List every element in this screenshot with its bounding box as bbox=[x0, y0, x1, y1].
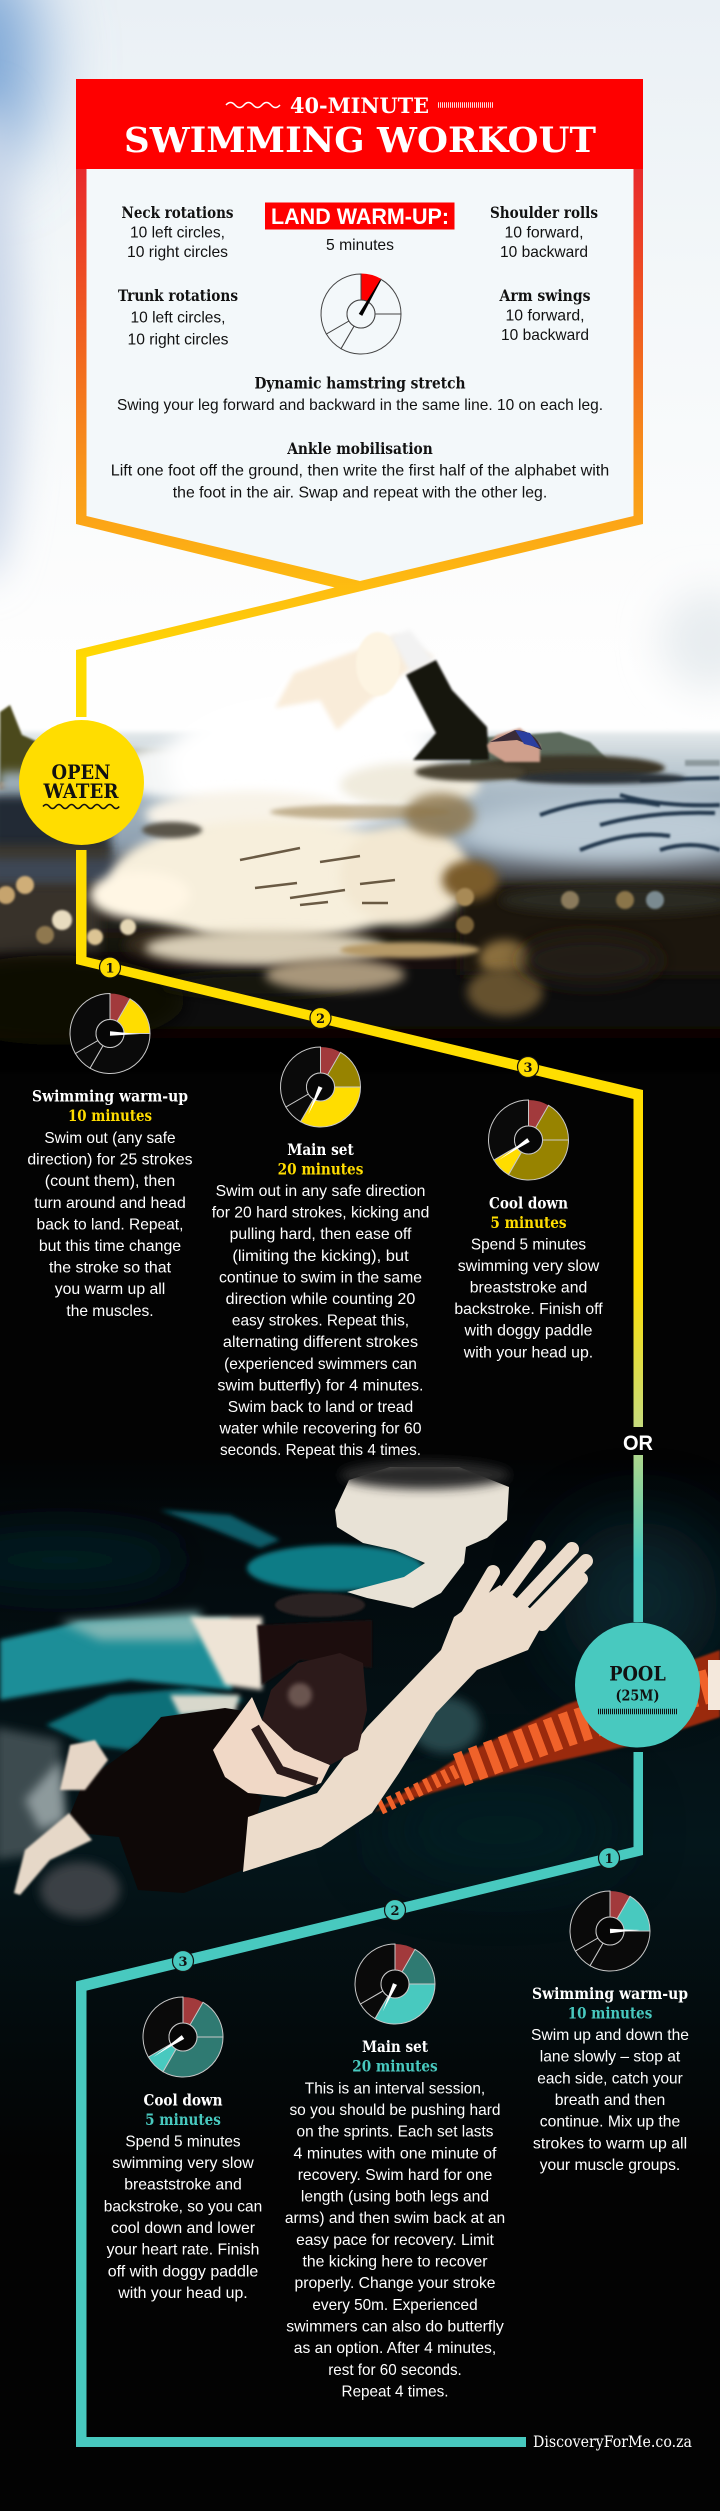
text: pool main set: Repeat 4 times. bbox=[342, 2383, 448, 2400]
path: warm-up frame bbox=[76, 165, 643, 717]
text: open water main set: alternating different strokes bbox=[223, 1334, 418, 1351]
text: open water main set: direction while counting 20 bbox=[226, 1291, 415, 1308]
text: pool cool down: cool down and lower bbox=[111, 2220, 256, 2237]
step marker 3 pool: 3 bbox=[178, 1955, 188, 1970]
text: pool main set: Main set bbox=[362, 2037, 429, 2056]
text: neck rotations bbox=[122, 203, 234, 261]
bokeh and lower glints bbox=[0, 876, 720, 1045]
text: pool cool down: Spend 5 minutes bbox=[125, 2133, 241, 2150]
text: open water swimming warm-up: you warm up all bbox=[55, 1281, 165, 1298]
text: trunk rotations bbox=[118, 286, 238, 348]
chart: land warm-up clock bbox=[321, 274, 401, 354]
background: pool photo bbox=[0, 1460, 720, 2160]
badge: pool: (25M) bbox=[616, 1686, 660, 1704]
text: pool swimming warm-up: 10 minutes bbox=[568, 2004, 652, 2022]
step marker 2 open water bbox=[310, 1008, 331, 1028]
water detail bbox=[0, 746, 720, 975]
path: open water route bbox=[76, 850, 643, 1427]
title line 1: 40-MINUTE bbox=[290, 93, 429, 118]
text: pool cool down: your heart rate. Finish bbox=[107, 2242, 259, 2259]
text: open water main set: pulling hard, then ease off bbox=[230, 1226, 412, 1243]
text: pool cool down: Cool down bbox=[144, 2090, 223, 2110]
text: open water cool down: Spend 5 minutes bbox=[471, 1236, 586, 1253]
badge: open water: OPEN bbox=[52, 760, 110, 784]
step marker 2 open water: 2 bbox=[316, 1012, 325, 1027]
text: open water swimming warm-up: the stroke so that bbox=[49, 1260, 172, 1277]
chart: pool warm-up clock bbox=[570, 1891, 650, 1971]
source credit: DiscoveryForMe.co.za bbox=[533, 2432, 692, 2451]
text: open water cool down: with your head up. bbox=[463, 1344, 593, 1361]
step marker 1 pool: 1 bbox=[604, 1852, 614, 1867]
text: arm swings: 10 forward, bbox=[506, 308, 584, 324]
text: open water swimming warm-up: the muscles. bbox=[66, 1303, 154, 1320]
chart: open water warm-up clock bbox=[70, 994, 150, 1073]
hills and trees bbox=[0, 705, 720, 790]
text: open water main set: easy strokes. Repeat this, bbox=[232, 1313, 409, 1330]
text: open water swimming warm-up: but this time change bbox=[39, 1238, 181, 1255]
text: pool main set bbox=[285, 2037, 505, 2400]
text: pool main set: so you should be pushing hard bbox=[289, 2102, 501, 2119]
text: open water main set: 20 minutes bbox=[278, 1160, 363, 1178]
text: open water swimming warm-up: turn around and head bbox=[34, 1195, 186, 1212]
text: arm swings: Arm swings bbox=[499, 286, 591, 305]
text: open water main set: seconds. Repeat this 4 times. bbox=[220, 1442, 421, 1459]
text: arm swings: 10 backward bbox=[501, 327, 589, 344]
text: pool main set: length (using both legs and bbox=[301, 2189, 489, 2206]
swimmer: goggle strap bbox=[255, 1727, 317, 1782]
background: sky bbox=[0, 0, 720, 770]
text: open water swimming warm-up: 10 minutes bbox=[68, 1106, 152, 1125]
text: open water cool down: backstroke. Finish off bbox=[454, 1301, 603, 1318]
text: open water swimming warm-up bbox=[27, 1086, 193, 1320]
text: open water cool down: Cool down bbox=[489, 1194, 568, 1212]
icon: barcode stripes bbox=[438, 102, 494, 108]
panel header: 40-minute swimming workout bbox=[76, 79, 643, 169]
text: pool cool down: 5 minutes bbox=[145, 2110, 221, 2129]
text: arm swings bbox=[499, 286, 591, 344]
text: pool cool down: breaststroke and bbox=[124, 2177, 242, 2194]
text: pool main set: every 50m. Experienced bbox=[312, 2297, 478, 2314]
text: ankle mobilisation: Ankle mobilisation bbox=[286, 439, 433, 458]
text: shoulder rolls bbox=[490, 203, 598, 261]
text: pool swimming warm-up: continue. Mix up the bbox=[540, 2114, 680, 2131]
text: pool main set: This is an interval session, bbox=[305, 2080, 485, 2097]
text: neck rotations: 10 right circles bbox=[127, 244, 228, 261]
chart: open water cool down clock bbox=[489, 1100, 568, 1180]
chart: pool cool down clock bbox=[143, 1997, 223, 2077]
text: pool cool down: backstroke, so you can bbox=[104, 2198, 262, 2215]
text: open water main set: continue to swim in the same bbox=[219, 1269, 422, 1286]
text: open water swimming warm-up: direction) for 25 strokes bbox=[27, 1152, 193, 1169]
text: pool cool down bbox=[104, 2090, 262, 2302]
text: pool swimming warm-up bbox=[531, 1984, 689, 2174]
background: open water photo bbox=[0, 630, 720, 1500]
text: pool swimming warm-up: lane slowly – stop at bbox=[540, 2049, 681, 2066]
text: open water main set: for 20 hard strokes, kicking and bbox=[212, 1205, 429, 1222]
text: pool main set: 4 minutes with one minute of bbox=[294, 2145, 497, 2162]
swimmer: arm and raised hand bbox=[243, 1547, 586, 1872]
icon: wave bbox=[226, 102, 280, 108]
text: open water cool down: with doggy paddle bbox=[464, 1323, 593, 1340]
label: or: OR bbox=[623, 1432, 653, 1455]
path: pool route bbox=[76, 1752, 643, 2447]
text: pool swimming warm-up: breath and then bbox=[555, 2092, 665, 2109]
badge: pool bbox=[575, 1622, 700, 1748]
text: dynamic hamstring stretch bbox=[117, 374, 603, 414]
badge: pool: POOL bbox=[609, 1662, 666, 1686]
step marker 3 open water bbox=[518, 1056, 538, 1078]
text: pool main set: arms) and then swim back at an bbox=[285, 2210, 505, 2227]
text: open water cool down bbox=[454, 1194, 603, 1361]
text: pool main set: recovery. Swim hard for one bbox=[298, 2167, 492, 2184]
chart: pool main set clock bbox=[355, 1944, 435, 2024]
chart: open water main set clock bbox=[281, 1047, 360, 1127]
splash bbox=[90, 655, 498, 961]
text: pool swimming warm-up: Swimming warm-up bbox=[532, 1984, 688, 2003]
text: pool main set: 20 minutes bbox=[352, 2056, 438, 2076]
text: ankle mobilisation: the foot in the air. Swap and repeat with the other leg. bbox=[173, 484, 547, 502]
text: trunk rotations: 10 left circles, bbox=[130, 310, 226, 326]
text: shoulder rolls: 10 forward, bbox=[504, 224, 584, 242]
text: shoulder rolls: 10 backward bbox=[500, 244, 588, 261]
text: open water cool down: breaststroke and bbox=[470, 1280, 587, 1296]
text: pool swimming warm-up: Swim up and down the bbox=[531, 2027, 689, 2044]
swimmer: cap bbox=[262, 1653, 367, 1765]
text: pool main set: as an option. After 4 minutes, bbox=[294, 2340, 496, 2357]
text: open water swimming warm-up: Swim out (any safe bbox=[44, 1130, 176, 1147]
text: open water main set: (experienced swimmers can bbox=[224, 1356, 417, 1373]
heading: land warm-up: LAND WARM-UP: bbox=[271, 204, 449, 229]
text: pool swimming warm-up: strokes to warm up all bbox=[533, 2135, 687, 2152]
text: neck rotations: Neck rotations bbox=[122, 203, 234, 222]
text: open water swimming warm-up: (count them), then bbox=[45, 1173, 175, 1190]
text: pool main set: swimmers can also do butterfly bbox=[286, 2318, 504, 2335]
text: open water main set: swim butterfly) for 4 minutes. bbox=[217, 1377, 424, 1394]
text: pool main set: on the sprints. Each set lasts bbox=[297, 2124, 493, 2141]
text: open water main set: Swim back to land or tread bbox=[228, 1399, 413, 1416]
text: neck rotations: 10 left circles, bbox=[130, 224, 225, 242]
step marker 1 open water bbox=[100, 957, 120, 978]
swimmer: rear arm bbox=[14, 1813, 92, 1895]
swimmer: face bbox=[213, 1697, 330, 1797]
step marker 1 pool bbox=[598, 1848, 620, 1868]
step marker 3 pool bbox=[172, 1950, 194, 1972]
text: dynamic hamstring stretch: Swing your leg forward and backward in the same line. 10 on each leg. bbox=[117, 397, 603, 414]
text: pool swimming warm-up: each side, catch your bbox=[537, 2070, 683, 2087]
text: open water main set bbox=[212, 1140, 429, 1459]
text: open water main set: Swim out in any safe direction bbox=[216, 1183, 425, 1200]
swimmer: body bbox=[69, 1708, 262, 1893]
text: pool main set: the kicking here to recover bbox=[302, 2254, 488, 2270]
text: pool cool down: with your head up. bbox=[117, 2285, 248, 2302]
swimmer bbox=[275, 630, 685, 784]
pool surface reflections bbox=[0, 1510, 480, 1918]
text: open water main set: (limiting the kicking), but bbox=[232, 1248, 409, 1265]
white water shape bbox=[335, 1467, 509, 1608]
text: open water cool down: swimming very slow bbox=[458, 1258, 600, 1275]
swimmer: hand bbox=[60, 1740, 108, 1790]
text: pool main set: easy pace for recovery. Limit bbox=[296, 2232, 494, 2249]
text: pool cool down: off with doggy paddle bbox=[108, 2263, 258, 2280]
text: pool swimming warm-up: your muscle groups. bbox=[540, 2157, 680, 2174]
step marker 3 open water: 3 bbox=[523, 1061, 533, 1076]
step marker 2 pool: 2 bbox=[390, 1904, 400, 1919]
text: open water swimming warm-up: back to land. Repeat, bbox=[37, 1216, 183, 1233]
text: pool cool down: swimming very slow bbox=[112, 2155, 254, 2172]
step marker 2 pool bbox=[384, 1900, 406, 1920]
text: trunk rotations: 10 right circles bbox=[128, 332, 228, 348]
text: open water cool down: 5 minutes bbox=[490, 1213, 567, 1232]
lane rope bbox=[374, 1650, 720, 1812]
text: pool main set: rest for 60 seconds. bbox=[328, 2362, 462, 2379]
text: ankle mobilisation: Lift one foot off the ground, then write the first half of the alphabet with bbox=[111, 462, 609, 480]
text: shoulder rolls: Shoulder rolls bbox=[490, 203, 598, 222]
text: open water swimming warm-up: Swimming warm-up bbox=[32, 1086, 188, 1106]
heading: land warm-up bbox=[265, 202, 454, 254]
badge: open water bbox=[19, 720, 144, 845]
swimmer: upper reflection bbox=[257, 1593, 372, 1685]
heading: land warm-up: 5 minutes bbox=[326, 237, 394, 254]
text: pool main set: properly. Change your stroke bbox=[294, 2275, 496, 2292]
text: dynamic hamstring stretch: Dynamic hamstring stretch bbox=[254, 374, 466, 392]
text: open water main set: water while recovering for 60 bbox=[219, 1421, 422, 1438]
title line 2: SWIMMING WORKOUT bbox=[124, 120, 596, 161]
text: trunk rotations: Trunk rotations bbox=[118, 286, 238, 305]
badge: open water: WATER bbox=[43, 779, 119, 803]
text: open water main set: Main set bbox=[287, 1140, 354, 1159]
text: ankle mobilisation bbox=[111, 439, 609, 502]
step marker 1 open water: 1 bbox=[105, 962, 115, 976]
path: or to pool bbox=[634, 1455, 643, 1622]
